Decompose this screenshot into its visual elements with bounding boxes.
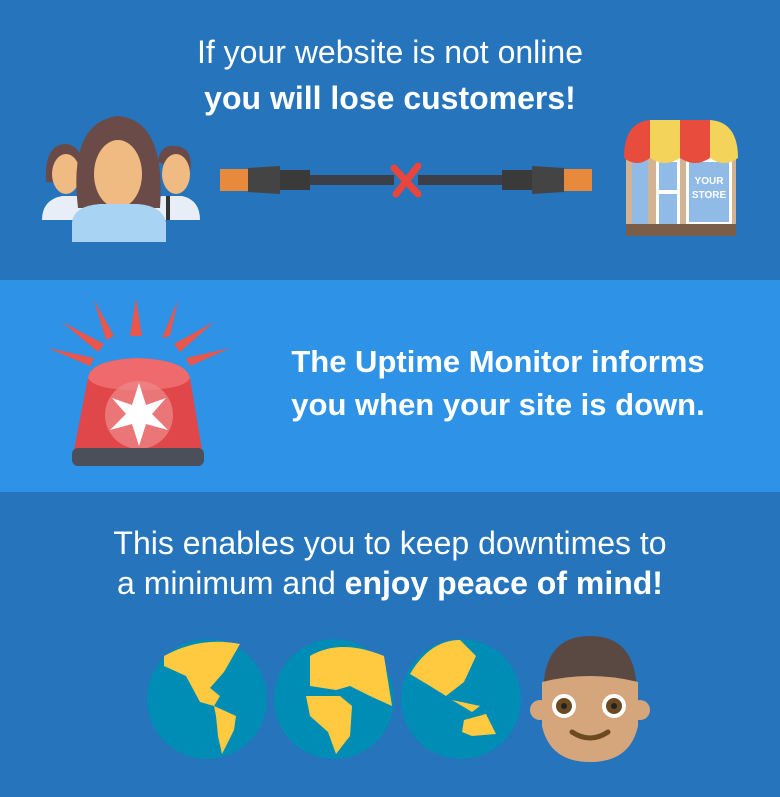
icon: customers xyxy=(42,116,200,242)
text: peace of mind: This enables you to keep downtimes to xyxy=(113,525,667,561)
panel: middle xyxy=(0,280,780,492)
text: peace of mind: a minimum and enjoy peace of mind! xyxy=(117,565,663,601)
icon: store xyxy=(624,120,738,236)
icon: store: STORE xyxy=(692,190,726,201)
text: peace of mind xyxy=(113,525,667,601)
panel: top xyxy=(0,0,780,280)
text: uptime monitor xyxy=(291,344,705,422)
heading: lose customers: you will lose customers! xyxy=(204,80,576,116)
icon: store: YOUR xyxy=(695,176,724,187)
heading: lose customers xyxy=(197,34,583,116)
icon: siren xyxy=(48,300,230,466)
panel: bottom xyxy=(0,492,780,797)
heading: lose customers: If your website is not online xyxy=(197,34,583,70)
text: uptime monitor: The Uptime Monitor informs xyxy=(291,344,705,379)
icon: broken cable xyxy=(220,162,592,198)
icon: globes and face xyxy=(147,636,650,762)
text: uptime monitor: you when your site is down. xyxy=(291,387,705,422)
